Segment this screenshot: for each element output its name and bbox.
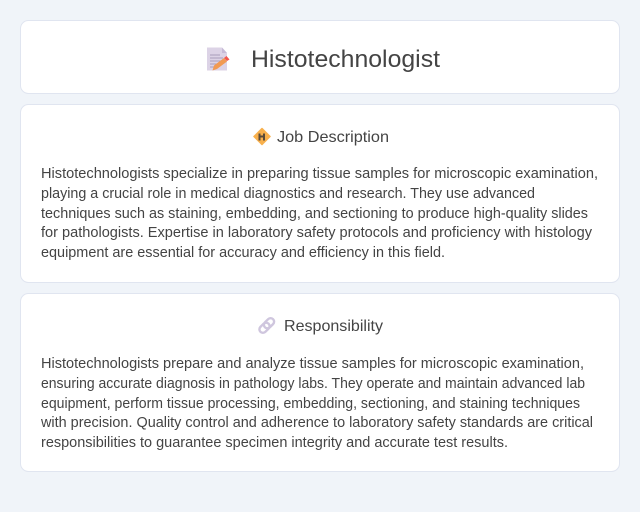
text block: responsibility: Histotechnologists prepare and analyze tissue samples for microscopic examination, bbox=[41, 356, 584, 372]
icon: orange diamond bbox=[254, 128, 270, 144]
text block: job description: playing a crucial role in medical diagnostics and research. They use advanced bbox=[41, 186, 535, 202]
panel: title bbox=[20, 20, 620, 94]
text block: responsibility: equipment, perform tissue processing, embedding, sectioning, and staining techniques bbox=[41, 396, 580, 412]
text block: responsibility: ensuring accurate diagnosis in pathology labs. They operate and maintain advanced lab bbox=[41, 376, 585, 392]
text block: job description: Histotechnologists specialize in preparing tissue samples for microscopic examination, bbox=[41, 166, 598, 182]
text block: job description: equipment are essential for accuracy and efficiency in this field. bbox=[41, 245, 445, 261]
heading: Histotechnologist: Histotechnologist bbox=[251, 46, 440, 73]
panel: job description bbox=[20, 104, 620, 282]
heading: Responsibility: Responsibility bbox=[284, 318, 383, 335]
text block: job description: techniques such as staining, embedding, and sectioning to produce high-quality slides bbox=[41, 206, 588, 222]
text block: responsibility bbox=[40, 356, 593, 451]
text block: job description: for pathologists. Expertise in laboratory safety protocols and proficiency with histology bbox=[41, 225, 593, 241]
panel: responsibility bbox=[20, 294, 620, 472]
text block: responsibility: with precision. Quality control and adherence to laboratory safety standards are critical bbox=[40, 415, 593, 431]
heading: Job Description: Job Description bbox=[277, 129, 389, 146]
text block: responsibility: responsibilities to guarantee specimen integrity and accurate test results. bbox=[41, 435, 508, 451]
icon: memo and pencil bbox=[207, 48, 230, 70]
text block: job description bbox=[41, 166, 598, 261]
icon: chain link bbox=[258, 317, 276, 334]
